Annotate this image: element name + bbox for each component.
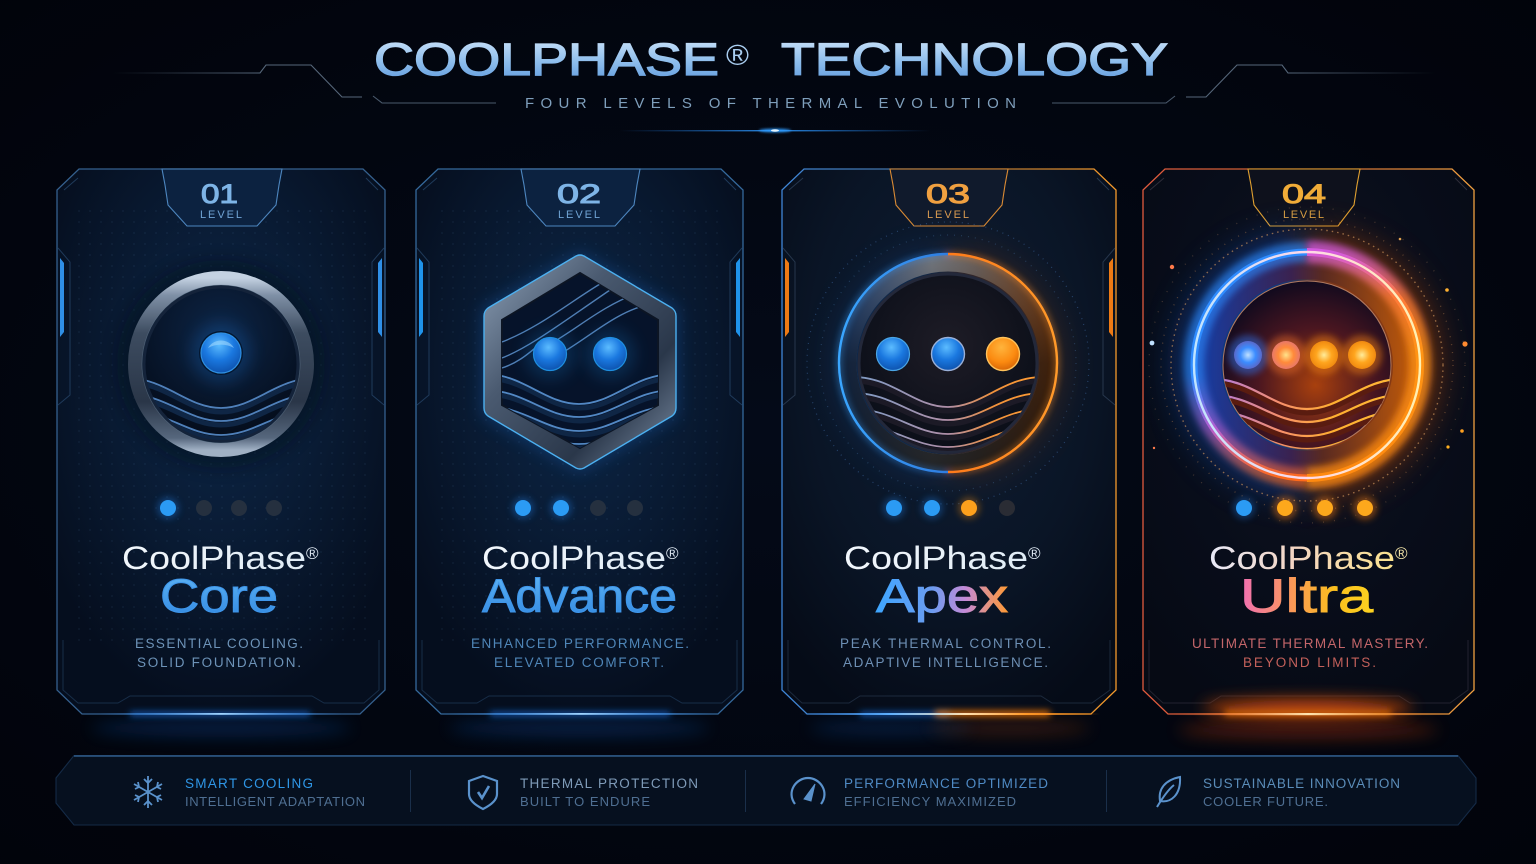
level badge: LEVEL: [927, 209, 969, 221]
icon: gauge: [792, 778, 824, 804]
description: ENHANCED PERFORMANCE.: [471, 636, 689, 651]
feature: performance optimized: EFFICIENCY MAXIMIZED: [844, 794, 1016, 809]
card frame: [416, 169, 743, 714]
product name: ®: [1395, 544, 1408, 563]
dot texture: [434, 205, 725, 645]
product name: Ultra: [1240, 569, 1374, 622]
feature: sustainable innovation: SUSTAINABLE INNOVATION: [1203, 776, 1400, 791]
side light bars: [785, 258, 1113, 337]
feature: smart cooling: SMART COOLING: [185, 776, 313, 791]
level badge: [162, 169, 282, 226]
progress dots: [883, 497, 1015, 519]
description: ADAPTIVE INTELLIGENCE.: [843, 655, 1048, 670]
level badge: [1248, 169, 1360, 226]
side light bars: [60, 258, 382, 337]
icon: snowflake: [134, 776, 162, 808]
inner frame: [783, 178, 1115, 703]
dot texture: [75, 205, 367, 645]
subtitle: FOUR LEVELS OF THERMAL EVOLUTION: [525, 95, 1016, 112]
emblem: hexagon with two dots: [482, 252, 678, 472]
product name: Apex: [876, 569, 1008, 622]
bottom light: [1170, 700, 1446, 716]
bottom light: [450, 712, 712, 716]
description: ELEVATED COMFORT.: [494, 655, 664, 670]
feature: performance optimized: [792, 776, 1048, 809]
title: [374, 34, 1168, 85]
description: [840, 636, 1051, 670]
card frame: [1143, 169, 1474, 714]
title: COOLPHASE: [374, 34, 719, 85]
header glow accent: [620, 129, 930, 132]
feature: thermal protection: [469, 776, 698, 809]
progress dots: [512, 497, 643, 519]
level badge: LEVEL: [1283, 209, 1324, 221]
level badge: [521, 169, 640, 226]
right header circuit lines: [1052, 65, 1435, 103]
level badge: LEVEL: [558, 209, 600, 221]
product name: [122, 540, 319, 622]
icon: shield: [469, 776, 497, 809]
product name: [1209, 540, 1408, 622]
bottom light: [100, 712, 342, 716]
glow under cards: [91, 719, 1438, 739]
side light bars: [419, 258, 740, 337]
description: [471, 636, 689, 670]
product name: [844, 540, 1041, 622]
feature: sustainable innovation: COOLER FUTURE.: [1203, 794, 1328, 809]
panel: level 01 core: [57, 169, 385, 716]
feature bar: [56, 756, 1476, 825]
level badge: 01: [201, 179, 238, 209]
level badge: [890, 169, 1008, 226]
title: ®: [726, 40, 749, 72]
description: ESSENTIAL COOLING.: [135, 636, 303, 651]
panel: level 03 apex: [782, 169, 1116, 716]
inner frame: [58, 178, 384, 703]
panel: level 04 ultra: [1143, 169, 1474, 716]
left header circuit lines: [113, 65, 496, 103]
emblem: circle with one dot: [117, 260, 325, 468]
title: TECHNOLOGY: [781, 34, 1168, 85]
level badge: 02: [557, 179, 601, 209]
product name: CoolPhase: [482, 540, 666, 576]
description: SOLID FOUNDATION.: [137, 655, 301, 670]
feature: smart cooling: [134, 776, 365, 809]
product name: Core: [160, 569, 278, 622]
inner frame: [417, 178, 742, 703]
emblem: glowing ring with four dots: [1149, 207, 1465, 523]
product name: ®: [1028, 544, 1041, 563]
emblem: dual-tone ring with three dots: [807, 222, 1089, 504]
feature: performance optimized: PERFORMANCE OPTIMIZED: [844, 776, 1048, 791]
level badge: LEVEL: [200, 209, 242, 221]
feature: thermal protection: BUILT TO ENDURE: [520, 794, 650, 809]
description: [1192, 636, 1428, 670]
bottom light: [800, 711, 1100, 716]
feature: thermal protection: THERMAL PROTECTION: [520, 776, 698, 791]
inner frame: [1149, 178, 1468, 703]
feature: smart cooling: INTELLIGENT ADAPTATION: [185, 794, 365, 809]
product name: CoolPhase: [122, 540, 306, 576]
progress dots: [157, 497, 282, 519]
product name: CoolPhase: [844, 540, 1028, 576]
progress dots: [1233, 496, 1377, 520]
product name: Advance: [482, 569, 677, 622]
level badge: 04: [1282, 179, 1326, 209]
description: ULTIMATE THERMAL MASTERY.: [1192, 636, 1428, 651]
description: PEAK THERMAL CONTROL.: [840, 636, 1051, 651]
panel: level 02 advance: [416, 169, 743, 716]
product name: ®: [306, 544, 319, 563]
bar frame: [56, 756, 1476, 825]
description: BEYOND LIMITS.: [1243, 655, 1376, 670]
product name: ®: [666, 544, 679, 563]
bar top highlight: [74, 755, 1458, 757]
product name: CoolPhase: [1209, 540, 1395, 576]
spark particles: [1150, 238, 1468, 449]
feature: sustainable innovation: [1157, 776, 1400, 809]
icon: leaf: [1157, 777, 1180, 807]
card frame: [57, 169, 385, 714]
product name: [482, 540, 679, 622]
card frame: [782, 169, 1116, 714]
header: [113, 34, 1435, 132]
level badge: 03: [926, 179, 970, 209]
description: [135, 636, 303, 670]
